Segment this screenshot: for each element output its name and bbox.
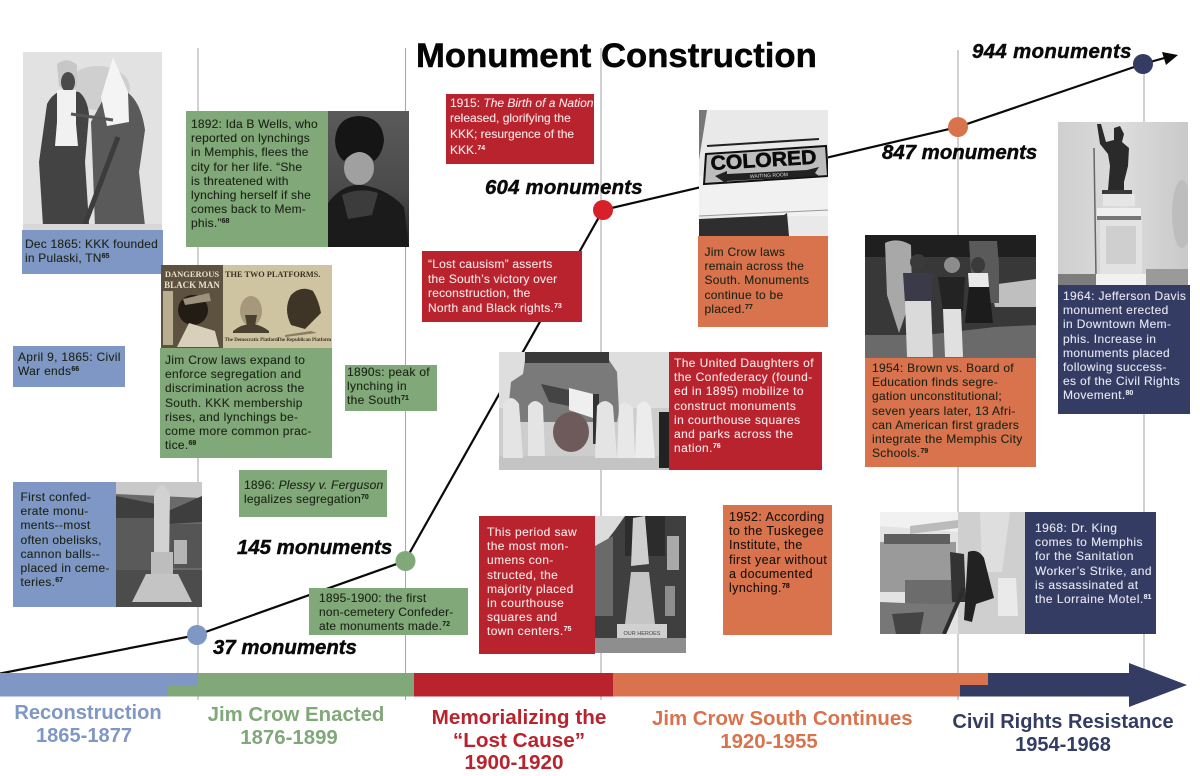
panel: Ida B Wells: comes back to Mem- [191, 202, 306, 216]
panel: monuments in courthouse squares: squares and [487, 610, 557, 624]
panel: Lost causism: “Lost causism” asserts [428, 257, 552, 271]
panel: Brown vs. Board of Education: Schools.79 [872, 446, 928, 460]
photo: Jim Crow era posters: The Democratic Platform [225, 338, 280, 343]
panel: monuments in courthouse squares: This period saw [487, 525, 577, 539]
panel: The Birth of a Nation: KKK.74 [450, 143, 485, 157]
panel: Jefferson Davis monument erected: monuments placed [1063, 346, 1170, 360]
panel: Brown vs. Board of Education [865, 358, 1036, 467]
panel: Plessy v. Ferguson [239, 470, 387, 517]
era label: Memorializing the Lost Cause [432, 706, 606, 774]
panel: The Birth of a Nation: KKK; resurgence of the [450, 127, 574, 141]
panel: monuments in courthouse squares: town centers.75 [487, 624, 571, 638]
panel: Ida B Wells: city for her life. “She [191, 160, 302, 174]
panel: 1952 Tuskegee: a documented [729, 567, 813, 581]
photo: Jim Crow era posters: THE TWO PLATFORMS. [225, 270, 320, 279]
panel: 1952 Tuskegee: to the Tuskegee [729, 524, 824, 538]
panel: 1952 Tuskegee: lynching.78 [729, 581, 790, 595]
panel: Brown vs. Board of Education: seven years later, 13 Afri- [872, 404, 1016, 418]
panel: Jim Crow laws remain [698, 236, 828, 327]
photo: United Daughters of the Confederacy [499, 352, 669, 470]
panel: Jim Crow laws remain: South. Monuments [704, 273, 809, 287]
panel: Jefferson Davis monument erected: es of the Civil Rights [1063, 374, 1180, 388]
photo: Jim Crow era posters: DANGEROUS [165, 269, 219, 279]
era label: Jim Crow Enacted [208, 704, 384, 749]
panel: Jim Crow laws expand: tice.69 [165, 438, 196, 452]
panel: monuments in courthouse squares: umens con- [487, 553, 554, 567]
era label: Civil Rights Resistance [952, 711, 1174, 756]
panel: Jefferson Davis monument erected: 1964: Jefferson Davis [1063, 289, 1186, 303]
panel: Dr. King in Memphis: Worker’s Strike, and [1035, 564, 1152, 578]
panel: The Birth of a Nation: released, glorifying the [450, 111, 571, 125]
panel: Lost causism: reconstruction, the [428, 286, 531, 300]
panel: first Confederate monuments: erate monu- [20, 504, 88, 518]
panel: peak of lynching [345, 365, 437, 411]
panel: 1952 Tuskegee [723, 505, 832, 635]
panel: Brown vs. Board of Education: Education finds segre- [872, 375, 998, 389]
panel: Dr. King in Memphis: the Lorraine Motel.81 [1035, 592, 1151, 606]
panel: Lost causism: North and Black rights.73 [428, 300, 562, 314]
era label: Reconstruction [14, 702, 162, 747]
panel: Jim Crow laws expand: come more common prac- [165, 424, 312, 438]
panel: peak of lynching: 1890s: peak of [347, 365, 430, 379]
photo: Ida B Wells portrait [328, 111, 409, 247]
panel: United Daughters of the Confederacy: ed in 1895) mobilize to [674, 384, 804, 398]
panel: Dr. King in Memphis: comes to Memphis [1035, 535, 1143, 549]
era label: Reconstruction: 1865-1877 [36, 725, 132, 747]
panel: Jefferson Davis monument erected: phis. Increase in [1063, 332, 1156, 346]
panel: peak of lynching: lynching in [347, 379, 407, 393]
panel: first non-cemetery monuments [309, 588, 468, 635]
panel: first non-cemetery monuments: 1895-1900: the first [319, 591, 426, 605]
panel: Dr. King in Memphis [1025, 512, 1156, 634]
panel: Dr. King in Memphis: 1968: Dr. King [1035, 521, 1117, 535]
monument count: 604: 604 monuments [485, 177, 643, 199]
panel: monuments in courthouse squares: structed, the [487, 568, 558, 582]
panel: 1952 Tuskegee: Institute, the [729, 538, 803, 552]
panel: Civil War ends: War ends66 [18, 364, 79, 378]
panel: Jim Crow laws expand: discrimination across the [165, 381, 305, 395]
era label: Jim Crow South Continues [652, 708, 913, 753]
panel: Jim Crow laws remain: Jim Crow laws [704, 245, 785, 259]
panel: Lost causism: the South’s victory over [428, 272, 557, 286]
panel: United Daughters of the Confederacy: the Confederacy (found- [674, 370, 813, 384]
photo: courthouse monument: OUR HEROES [624, 631, 661, 637]
panel: United Daughters of the Confederacy: The United Daughters of [674, 356, 814, 370]
panel: first Confederate monuments: ments--most [20, 518, 90, 532]
era label: Jim Crow South Continues: 1920-1955 [720, 731, 818, 753]
panel: Civil War ends: April 9, 1865: Civil [18, 350, 121, 364]
panel: first Confederate monuments: cannon balls-- [20, 547, 100, 561]
monument count: 37: 37 monuments [213, 637, 357, 659]
panel: United Daughters of the Confederacy: nation.76 [674, 441, 721, 455]
panel: Ida B Wells: 1892: Ida B Wells, who [191, 117, 318, 131]
panel: Plessy v. Ferguson: 1896: Plessy v. Ferguson [244, 478, 383, 492]
panel: first Confederate monuments: placed in ceme- [20, 561, 110, 575]
photo: Jim Crow era posters [161, 265, 332, 348]
photo: Jefferson Davis monument [1058, 122, 1188, 285]
photo: two Klansmen engraving [23, 52, 162, 230]
panel: United Daughters of the Confederacy: construct monuments [674, 399, 796, 413]
panel: first non-cemetery monuments: ate monuments made.72 [319, 619, 450, 633]
panel: United Daughters of the Confederacy: in courthouse squares [674, 413, 800, 427]
panel: Ida B Wells: is threatened with [191, 174, 289, 188]
panel: Ida B Wells: phis.”68 [191, 216, 229, 230]
panel: monuments in courthouse squares: in courthouse [487, 596, 564, 610]
panel: Jim Crow laws remain: continue to be [704, 288, 783, 302]
era label: Memorializing the Lost Cause: “Lost Cause” [453, 729, 585, 752]
monument count: 847: 847 monuments [882, 142, 1037, 164]
panel: Jim Crow laws remain: placed.77 [704, 302, 753, 316]
panel: Jefferson Davis monument erected [1058, 285, 1190, 414]
panel: monuments in courthouse squares [479, 516, 595, 654]
photo: Memphis first graders [865, 235, 1036, 358]
title: Monument Construction [416, 37, 817, 75]
photo: Jim Crow era posters: The Republican Platform [277, 338, 332, 343]
era label: Memorializing the Lost Cause: Memorializing the [432, 706, 606, 729]
timeline bar with arrow [0, 663, 1187, 707]
panel: Brown vs. Board of Education: can American first graders [872, 418, 1019, 432]
era: Jim Crow Enacted [168, 673, 414, 696]
panel: Ida B Wells: in Memphis, flees the [191, 145, 309, 159]
panel: Lost causism [422, 251, 582, 322]
panel: Jim Crow laws expand: South. KKK membership [165, 396, 303, 410]
panel: Jim Crow laws expand: rises, and lynchings be- [165, 410, 298, 424]
era label: Civil Rights Resistance: 1954-1968 [1015, 734, 1111, 756]
photo: Jim Crow era posters: BLACK MAN [164, 280, 220, 290]
era label: Jim Crow South Continues: Jim Crow South Continues [652, 708, 913, 730]
panel: first Confederate monuments [13, 482, 116, 607]
photo: Colored waiting room sign [699, 110, 828, 236]
panel: monuments in courthouse squares: the most mon- [487, 539, 569, 553]
panel: KKK founded [22, 230, 163, 274]
era label: Jim Crow Enacted: 1876-1899 [240, 727, 338, 749]
panel: Dr. King in Memphis: is assassinated at [1035, 578, 1138, 592]
panel: Jefferson Davis monument erected: in Downtown Mem- [1063, 317, 1171, 331]
panel: Jefferson Davis monument erected: following success- [1063, 360, 1167, 374]
panel: peak of lynching: the South71 [347, 393, 409, 407]
panel: United Daughters of the Confederacy: and parks across the [674, 427, 793, 441]
panel: Jefferson Davis monument erected: Movement.80 [1063, 388, 1133, 402]
panel: Civil War ends [13, 346, 125, 387]
era: Jim Crow South [613, 673, 988, 696]
photo: Lorraine Motel [880, 512, 1025, 634]
panel: The Birth of a Nation: 1915: The Birth of a Nation [450, 96, 593, 110]
panel: Ida B Wells: reported on lynchings [191, 131, 310, 145]
panel: Jefferson Davis monument erected: monument erected [1063, 303, 1169, 317]
photo: cemetery obelisk [116, 482, 202, 607]
panel: Jim Crow laws expand [160, 348, 332, 458]
era label: Reconstruction: Reconstruction [14, 702, 162, 724]
era label: Jim Crow Enacted: Jim Crow Enacted [208, 704, 384, 726]
era: Civil Rights arrow [960, 663, 1187, 707]
panel: 1952 Tuskegee: first year without [729, 553, 827, 567]
panel: first non-cemetery monuments: non-cemetery Confeder- [319, 605, 453, 619]
panel: KKK founded: Dec 1865: KKK founded [25, 237, 158, 251]
photo: courthouse monument [595, 516, 686, 653]
photo: Colored waiting room sign: WAITING ROOM [750, 172, 788, 180]
panel: Dr. King in Memphis: for the Sanitation [1035, 549, 1134, 563]
panel: Ida B Wells [186, 111, 328, 247]
panel: first Confederate monuments: often obelisks, [20, 533, 102, 547]
panel: first Confederate monuments: First confed- [20, 490, 91, 504]
panel: Jim Crow laws expand: enforce segregation and [165, 367, 301, 381]
panel: KKK founded: in Pulaski, TN65 [25, 251, 109, 265]
era: Lost Cause [414, 673, 613, 696]
monument count: 944: 944 monuments [972, 41, 1132, 63]
era: Reconstruction [0, 673, 198, 696]
panel: Plessy v. Ferguson: legalizes segregation70 [244, 492, 369, 506]
panel: Ida B Wells: lynching herself if she [191, 188, 311, 202]
era label: Memorializing the Lost Cause: 1900-1920 [465, 751, 563, 774]
era label: Civil Rights Resistance: Civil Rights Resistance [952, 711, 1174, 733]
panel: Jim Crow laws remain: remain across the [704, 259, 804, 273]
panel: Brown vs. Board of Education: integrate the Memphis City [872, 432, 1023, 446]
panel: United Daughters of the Confederacy [669, 352, 822, 470]
monument count: 145: 145 monuments [237, 537, 392, 559]
panel: 1952 Tuskegee: 1952: According [729, 510, 825, 524]
panel: monuments in courthouse squares: majority placed [487, 582, 574, 596]
panel: The Birth of a Nation [446, 94, 594, 164]
photo: Colored waiting room sign: COLORED [710, 147, 817, 175]
panel: Brown vs. Board of Education: gation unconstitutional; [872, 389, 1002, 403]
panel: Brown vs. Board of Education: 1954: Brown vs. Board of [872, 361, 1014, 375]
panel: first Confederate monuments: teries.67 [20, 575, 63, 589]
panel: Jim Crow laws expand: Jim Crow laws expand to [165, 353, 305, 367]
